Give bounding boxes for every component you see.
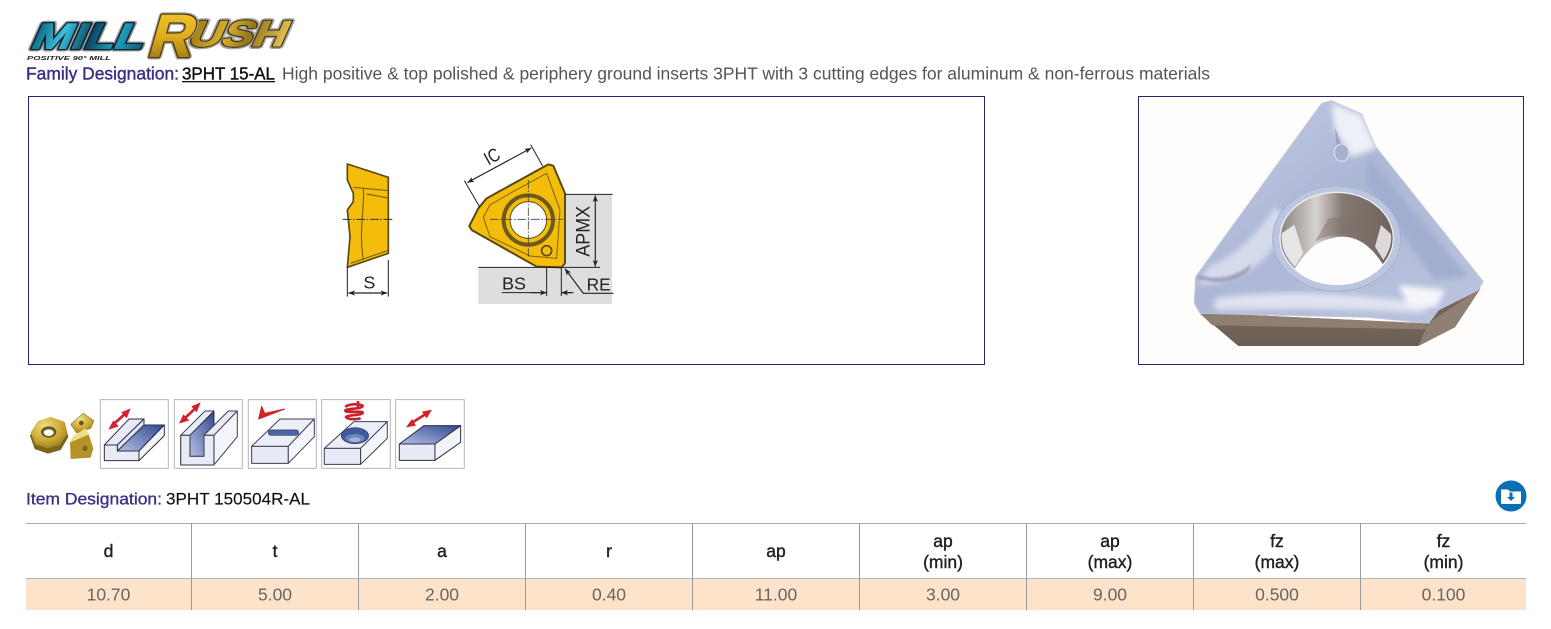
item designation: Item Designation: xyxy=(26,490,162,508)
logo: Mill Rush: R xyxy=(142,3,205,69)
logo: Mill Rush: R xyxy=(142,3,205,69)
table values: 0.100 xyxy=(1422,584,1466,604)
table header: fz xyxy=(1437,531,1450,551)
dimension: APMX: APMX xyxy=(574,206,595,257)
insert photo illustration xyxy=(1194,101,1483,346)
logo: Mill Rush xyxy=(26,3,297,69)
panel: technical drawing xyxy=(28,96,984,364)
dimension: BS and RE xyxy=(502,267,613,296)
icon: shoulder milling xyxy=(100,400,168,468)
table values: 9.00 xyxy=(1093,584,1127,604)
table values xyxy=(87,584,1466,604)
dimension: BS and RE: RE xyxy=(587,275,611,295)
icon: slot milling xyxy=(174,400,242,468)
panel: product photo xyxy=(1138,96,1524,364)
family designation heading: High positive & top polished & periphery ground inserts 3PHT with 3 cutting edges for aluminum & non-ferrous materials xyxy=(282,64,1210,84)
table values: 11.00 xyxy=(755,584,798,604)
table header: fz xyxy=(1270,531,1284,551)
icon: helical boring xyxy=(322,400,390,468)
diagram: insert dimensions xyxy=(343,143,613,304)
item designation xyxy=(26,490,310,508)
table header: d xyxy=(104,541,113,561)
family designation heading: 3PHT 15-AL xyxy=(182,64,275,84)
table values: 2.00 xyxy=(425,584,459,604)
logo: Mill Rush: MILL xyxy=(26,16,155,56)
table header: r xyxy=(606,541,612,561)
logo: Mill Rush: POSITIVE 90° MILL xyxy=(27,56,112,62)
table header: (max) xyxy=(1088,552,1132,572)
specification table xyxy=(26,523,1526,610)
table values: 0.40 xyxy=(592,584,626,604)
logo: Mill Rush: MILL xyxy=(26,16,155,56)
table header: ap xyxy=(766,541,786,561)
insert side view xyxy=(343,164,393,297)
logo: Mill Rush: R xyxy=(142,3,205,69)
table header xyxy=(104,531,1463,572)
table header: t xyxy=(273,541,278,561)
icon: inserts and nut xyxy=(30,413,94,459)
dimension: APMX xyxy=(478,194,613,267)
dimension: IC xyxy=(464,143,543,207)
table header: ap xyxy=(1100,531,1120,551)
table header: (min) xyxy=(1424,552,1463,572)
dimension: IC: IC xyxy=(480,143,504,169)
value row background xyxy=(26,578,1526,610)
application icons row xyxy=(30,400,464,468)
dimension: BS and RE: BS xyxy=(502,273,526,293)
table header: (min) xyxy=(923,552,963,572)
logo: Mill Rush: USH xyxy=(183,14,297,54)
family designation heading: Family Designation: xyxy=(26,64,179,84)
table header: a xyxy=(437,541,447,561)
insert top view xyxy=(469,164,565,267)
table values: 0.500 xyxy=(1255,584,1299,604)
icon: keyway milling xyxy=(248,400,316,468)
icon: download button xyxy=(1496,480,1526,512)
item designation: 3PHT 150504R-AL xyxy=(166,490,310,508)
logo: Mill Rush: USH xyxy=(183,14,297,54)
icon: face milling xyxy=(396,400,464,468)
logo: Mill Rush: USH xyxy=(183,14,297,54)
logo: Mill Rush: MILL xyxy=(26,16,155,56)
table values: 3.00 xyxy=(926,584,960,604)
table values: 5.00 xyxy=(258,584,292,604)
table header: (max) xyxy=(1255,552,1299,572)
table values: 10.70 xyxy=(87,584,131,604)
table header: ap xyxy=(933,531,953,551)
insert side view: S xyxy=(363,272,375,292)
